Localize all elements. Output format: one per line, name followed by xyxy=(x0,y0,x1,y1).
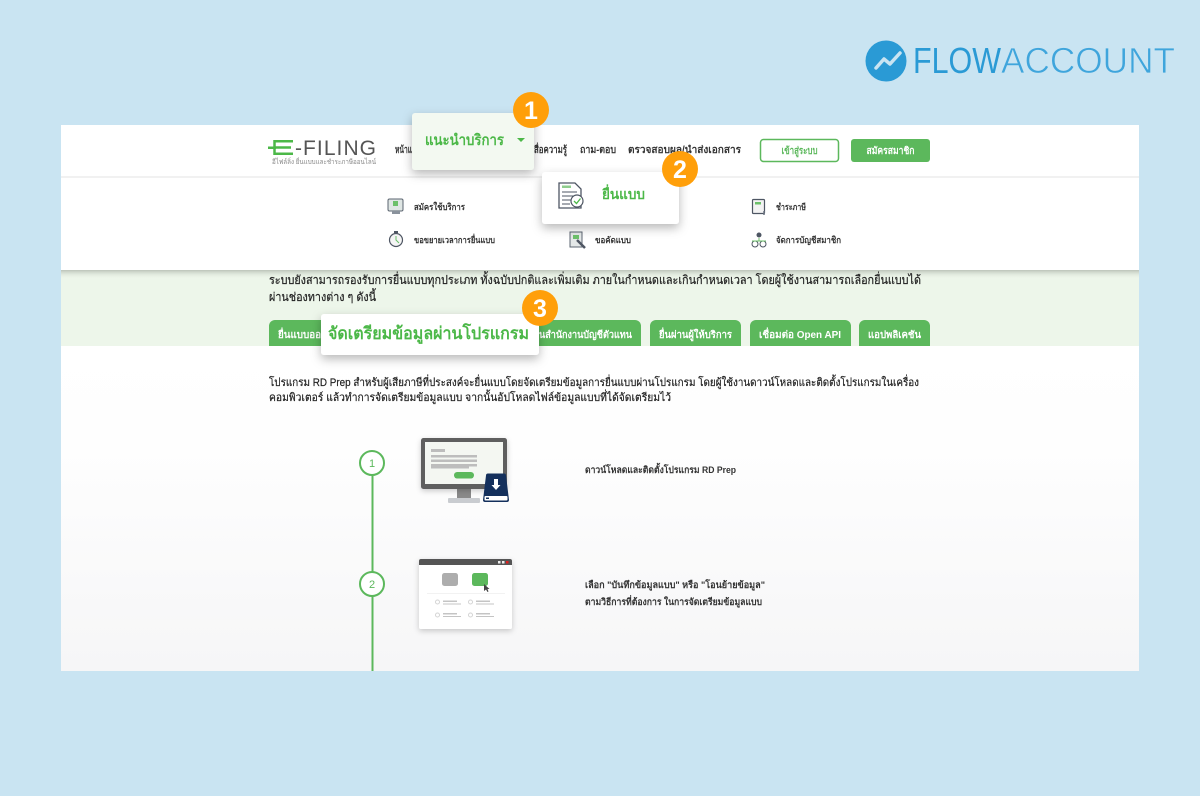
badge 2 xyxy=(662,151,698,187)
register button xyxy=(851,139,930,162)
green band xyxy=(61,270,1139,346)
FlowAccount logo: ACCOUNT xyxy=(1001,40,1175,81)
E-Filing logo: -FILING xyxy=(295,137,376,160)
step 2 text: ตามวิธีการที่ต้องการ ในการจัดเตรียมข้อมูลแบบ xyxy=(585,594,762,609)
intro paragraph: ผ่านช่องทางต่าง ๆ ดังนี้ xyxy=(269,288,377,304)
step 2 text: เลือก "บันทึกข้อมูลแบบ" หรือ "โอนย้ายข้อมูล" xyxy=(585,579,765,592)
navigation: สื่อความรู้ xyxy=(534,142,567,157)
intro paragraph: ระบบยังสามารถรองรับการยื่นแบบทุกประเภท ทั้งฉบับปกติและเพิ่มเติม ภายในกำหนดและเกินกำหนดเวลา โดยผู้ใช้งานสามารถเลือกยื่นแบบได้ xyxy=(269,271,921,288)
tab: tax agent office xyxy=(530,320,641,346)
login button: เข้าสู่ระบบ xyxy=(782,145,818,158)
timeline step 2 marker: 2 xyxy=(369,579,375,591)
website screenshot panel xyxy=(61,125,1139,671)
badge 1: 1 xyxy=(524,97,538,125)
tab: application xyxy=(859,320,930,346)
badge 3: 3 xyxy=(533,295,547,323)
menu item: manage accounts xyxy=(752,232,841,247)
callout card 3: prepare data via program: จัดเตรียมข้อมูลผ่านโปรแกรม xyxy=(328,323,529,345)
tab: online filing xyxy=(269,320,345,346)
tab: service provider: ยื่นผ่านผู้ให้บริการ xyxy=(659,327,733,342)
description paragraph: คอมพิวเตอร์ แล้วทำการจัดเตรียมข้อมูลแบบ จากนั้นอัปโหลดไฟล์ข้อมูลแบบที่ได้จัดเตรียมไว้ xyxy=(269,389,671,404)
E-Filing logo: อีไฟล์ลิ่ง ยื่นแบบและชำระภาษีออนไลน์ xyxy=(272,157,376,166)
tab: open API xyxy=(750,320,851,346)
callout card 1: service guide xyxy=(412,113,534,170)
tab: open API: เชื่อมต่อ Open API xyxy=(759,327,841,341)
navigation xyxy=(395,142,742,157)
tab: online filing: ยื่นแบบออ xyxy=(278,327,321,341)
menu item: register service: สมัครใช้บริการ xyxy=(414,201,465,212)
timeline step 1 marker: 1 xyxy=(369,458,375,470)
menu item: register service xyxy=(388,199,465,214)
menu item: manage accounts: จัดการบัญชีสมาชิก xyxy=(776,235,841,246)
timeline step 1 marker xyxy=(360,451,384,475)
intro paragraph xyxy=(269,271,921,304)
icon: tax document xyxy=(559,183,583,208)
header divider xyxy=(61,176,1139,178)
menu item: request copy: ขอคัดแบบ xyxy=(595,235,631,245)
FlowAccount logo: FLOW xyxy=(913,40,1001,81)
login button xyxy=(760,140,838,162)
callout card 1: service guide: แนะนำบริการ xyxy=(425,131,505,149)
description paragraph xyxy=(269,374,919,404)
FlowAccount logo xyxy=(866,40,1175,82)
tab: service provider xyxy=(650,320,741,346)
description paragraph: โปรแกรม RD Prep สำหรับผู้เสียภาษีที่ประสงค์จะยื่นแบบโดยจัดเตรียมข้อมูลการยื่นแบบผ่านโปรแกรม โดยผู้ใช้งานดาวน์โหลดและติดตั้งโปรแกรมในเครื่อง xyxy=(269,374,919,389)
menu item: request copy xyxy=(570,232,631,248)
step 1 text: ดาวน์โหลดและติดตั้งโปรแกรม RD Prep xyxy=(585,462,736,476)
menu item: pay tax: ชำระภาษี xyxy=(776,202,806,212)
badge 3 xyxy=(522,290,558,326)
E-Filing logo xyxy=(268,137,376,166)
callout card 2: file return xyxy=(542,172,679,224)
tab: application: แอปพลิเคชัน xyxy=(868,329,921,341)
timeline step 2 marker xyxy=(360,572,384,596)
tab: tax agent office: นสำนักงานบัญชีตัวแทน xyxy=(539,329,632,341)
timeline line xyxy=(372,475,374,671)
callout card 3: prepare data via program xyxy=(321,314,539,355)
badge 2: 2 xyxy=(673,156,687,184)
dropdown shadow xyxy=(61,270,1139,279)
icon: monitor with download drive xyxy=(421,438,509,503)
icon: program window xyxy=(419,559,512,629)
menu item: pay tax xyxy=(752,200,806,215)
menu item: extend deadline xyxy=(390,231,495,246)
lower page background xyxy=(61,346,1139,671)
badge 1 xyxy=(513,92,549,128)
navigation: ถาม-ตอบ xyxy=(580,145,616,156)
menu item: extend deadline: ขอขยายเวลาการยื่นแบบ xyxy=(414,233,495,245)
navigation: หน้าแ xyxy=(395,144,412,156)
navigation: ตรวจสอบผล/นำส่งเอกสาร xyxy=(628,144,742,156)
register button: สมัครสมาชิก xyxy=(866,145,914,157)
upper page background xyxy=(61,125,1139,346)
step 2 text xyxy=(585,579,765,609)
callout card 2: file return: ยื่นแบบ xyxy=(602,184,645,202)
